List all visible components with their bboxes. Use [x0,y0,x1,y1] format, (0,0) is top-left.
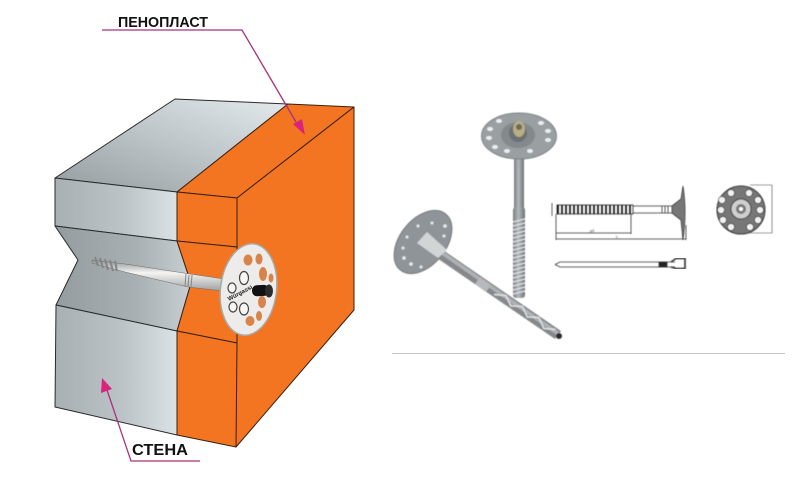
side view: dimension labels: ρ2 [590,228,595,233]
nail: collar [659,262,667,267]
foam: notch face [177,241,237,343]
front view: holes [718,190,764,230]
anchor: black nail head [252,284,273,298]
vertical anchor: centre hub [501,121,535,148]
heading: wall label: СТЕНА [132,442,188,459]
anchor: brand text: Würgassi [227,285,254,303]
heading: foam label: ПЕНОПЛАСТ [118,14,208,31]
angled anchor: shaft [434,248,561,339]
wall: top face [55,99,288,192]
side view: dimension lines [552,203,686,240]
anchor in the wall [92,240,282,339]
product photo: vertical anchor [482,113,556,298]
technical drawing: side view [552,186,686,240]
front view: disc [717,186,765,234]
vertical anchor: threaded tip [513,207,525,298]
technical drawing: front view of disc [717,185,772,234]
angled anchor: slotted tip [494,294,556,330]
panel: wall and foam block [55,99,354,447]
foam: upper front face [177,192,237,247]
anchor: shaft [92,260,231,292]
side view: dimension labels [590,228,619,239]
label: wall leader arrow [101,378,200,461]
product photo: angled anchor [382,200,562,339]
label: foam leader arrow [102,30,305,135]
wall: upper front face [55,178,177,241]
side view: threaded body [557,205,633,214]
angled anchor: disc [382,200,464,284]
vertical anchor: disc holes [486,119,551,153]
angled anchor: disc holes [402,222,447,268]
side view: shaft and collar [633,206,672,213]
anchor: expansion ribs [95,257,192,287]
nail: head [671,258,685,268]
front view: dimension lines [750,185,772,233]
foam: right side face [236,107,354,447]
anchor: white holes [228,272,248,315]
divider line [392,353,785,354]
nail: shaft [555,262,675,267]
angled anchor: end cap [556,333,562,339]
side view: cone and head [672,186,685,240]
vertical anchor: shaft [514,158,524,270]
wall: notch faces [55,226,191,331]
technical drawing: nail [555,258,685,268]
anchor: orange holes [244,254,274,326]
anchor: white disc [215,240,282,339]
wall: lower front face [55,305,177,435]
foam: lower front face [177,331,237,447]
front view: hub [731,199,751,219]
angled anchor: collar [475,277,491,292]
foam: top face [177,104,354,198]
vertical anchor: disc [482,113,556,159]
angled anchor: cone [417,232,447,258]
side view: dimension labels: L [616,234,619,239]
